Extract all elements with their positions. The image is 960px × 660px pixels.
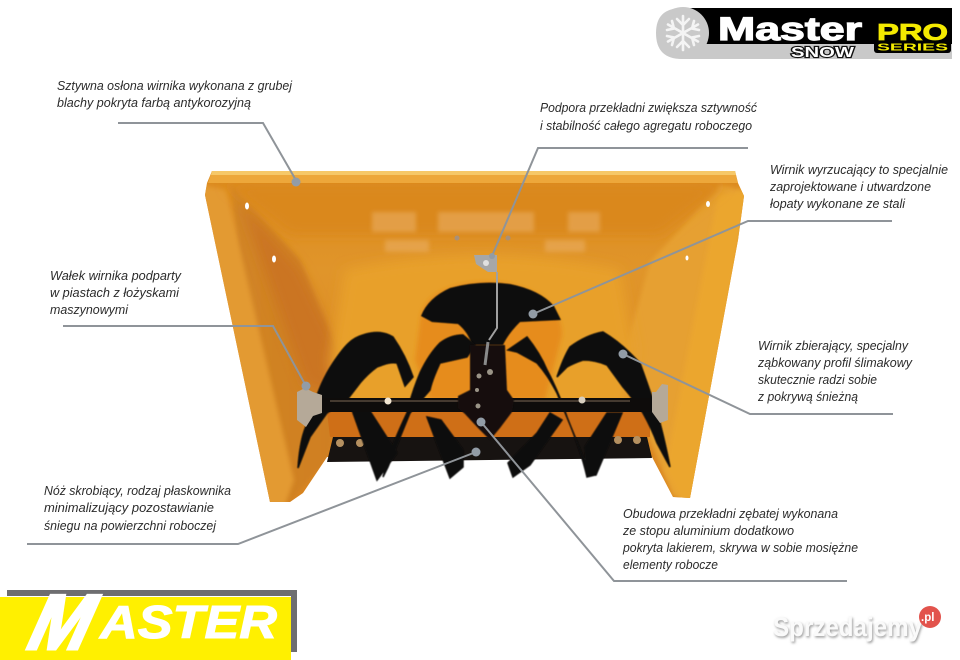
gearbox housing — [458, 345, 514, 440]
callout: auger shaft: maszynowymi — [50, 303, 129, 317]
right wall — [625, 185, 744, 497]
callout: scraper blade: śniegu na powierzchni roboczej — [44, 519, 217, 533]
callout: gearbox support: i stabilność całego agregatu roboczego — [540, 119, 752, 133]
watermark: Sprzedajemy.pl: .pl — [921, 612, 934, 624]
callout: collecting auger: skutecznie radzi sobie — [758, 373, 877, 387]
logo: Master Snow Pro Series: SNOW — [791, 44, 855, 61]
callout: gearbox housing: elementy robocze — [623, 558, 718, 572]
logo: Master — [0, 579, 297, 660]
top lip — [208, 171, 738, 183]
mounting bracket — [474, 255, 497, 272]
product photo: snow thrower housing — [200, 171, 748, 505]
callout: housing guard: Sztywna osłona wirnika wykonana z grubej — [57, 79, 293, 93]
augers — [298, 332, 670, 480]
callout: gearbox housing: ze stopu aluminium dodatkowo — [622, 524, 794, 538]
callout: gearbox housing: pokryta lakierem, skrywa w sobie mosiężne — [622, 541, 858, 555]
callout: gearbox housing — [476, 418, 858, 581]
icon: snowflake — [667, 16, 699, 50]
callout: housing guard: blachy pokryta farbą antykorozyjną — [57, 96, 251, 110]
callout: auger shaft: Wałek wirnika podparty — [50, 269, 182, 283]
callout: collecting auger: Wirnik zbierający, specjalny — [758, 339, 909, 353]
left bearing hub — [297, 388, 322, 427]
right outer band — [676, 190, 744, 498]
logo: Master Snow Pro Series: PRO — [877, 19, 948, 45]
watermark: Sprzedajemy.pl: Sprzedajemy — [773, 612, 922, 642]
gearbox support rod — [489, 272, 497, 340]
callout: housing guard — [57, 79, 300, 186]
right bearing hub — [652, 384, 668, 423]
chute opening — [415, 282, 562, 400]
logo: Master Snow Pro Series: SERIES — [877, 42, 948, 54]
upper back wall shade — [272, 189, 722, 230]
callout: collecting auger: z pokrywą śnieżną — [757, 390, 858, 404]
callout: collecting auger — [618, 339, 913, 414]
callout: auger shaft: w piastach z łożyskami — [50, 286, 180, 300]
callout: scraper blade: Nóż skrobiący, rodzaj płaskownika — [44, 484, 231, 498]
callout: scraper blade: minimalizujący pozostawianie — [44, 501, 214, 515]
lower orange strip — [327, 412, 650, 437]
callout: gearbox support: Podpora przekładni zwiększa sztywność — [540, 101, 758, 115]
callout: collecting auger: ząbkowany profil ślimakowy — [757, 356, 913, 370]
auger shaft — [318, 398, 652, 412]
callout: discharge impeller: zaprojektowane i utwardzone — [769, 180, 931, 194]
callout: discharge impeller: Wirnik wyrzucający to specjalnie — [770, 163, 948, 177]
holes — [245, 201, 710, 262]
logo: Master Snow Pro Series: Master — [718, 11, 862, 47]
callout: scraper blade — [27, 448, 480, 544]
callout: discharge impeller — [528, 163, 948, 318]
reflections — [372, 212, 600, 252]
callout: gearbox housing: Obudowa przekładni zębatej wykonana — [623, 507, 838, 521]
left interior shading — [250, 220, 329, 386]
logo: Master Snow Pro Series — [656, 7, 952, 61]
housing body — [205, 171, 744, 502]
dark chute dome — [421, 283, 561, 345]
scraper blade — [327, 437, 652, 462]
logo: Master: ASTER — [99, 596, 277, 648]
callout: discharge impeller: łopaty wykonane ze stali — [770, 197, 906, 211]
left wall — [234, 197, 332, 502]
callout: auger shaft — [50, 269, 310, 390]
left outer band — [200, 185, 294, 505]
central hopper — [326, 257, 630, 398]
callout: gearbox support — [489, 101, 758, 259]
